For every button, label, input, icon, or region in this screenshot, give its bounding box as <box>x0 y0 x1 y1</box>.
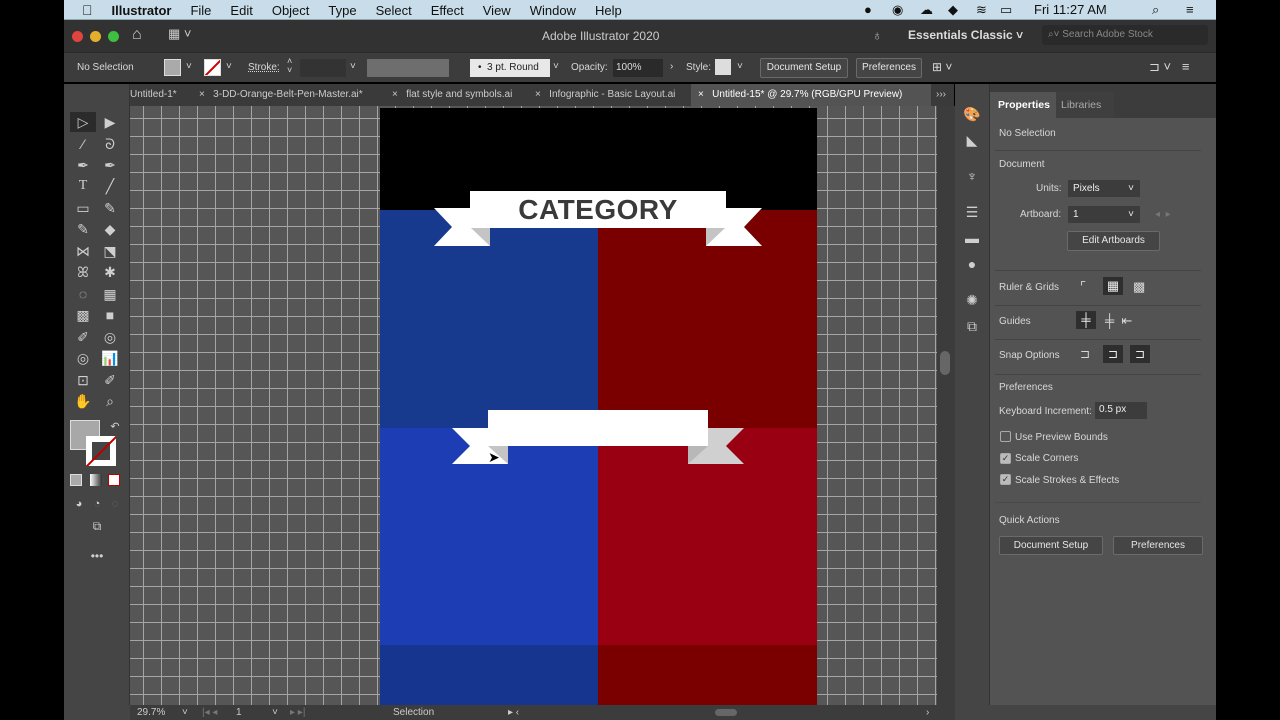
properties panel: ⌜ <box>1080 279 1086 294</box>
control bar: ˅ <box>737 61 743 72</box>
left toolbar: ⁄ <box>82 136 84 152</box>
title bar: ⌂ <box>132 26 142 43</box>
properties panel: ˅ <box>1128 183 1134 194</box>
left toolbar: ✱ <box>104 264 116 280</box>
left toolbar: ◌ <box>79 286 87 302</box>
properties panel: ▦ <box>1107 278 1119 293</box>
properties panel: 0.5 px <box>1099 404 1126 415</box>
left toolbar: ✒ <box>77 157 89 173</box>
left toolbar: ••• <box>91 549 103 563</box>
properties panel: Units: <box>1036 183 1062 194</box>
properties panel: ▩ <box>1133 279 1145 294</box>
left toolbar: ╱ <box>106 178 114 194</box>
properties panel: Preferences <box>1131 540 1185 551</box>
control bar: ˅ <box>553 61 559 72</box>
control bar: Style: <box>686 62 711 73</box>
left toolbar: ✎ <box>104 200 116 216</box>
left toolbar: ✐ <box>77 329 89 345</box>
panel icon strip: ♆ <box>967 168 977 184</box>
left toolbar: ⬔ <box>103 243 117 259</box>
mac menu bar: Fri 11:27 AM <box>1034 2 1107 17</box>
properties panel: Keyboard Increment: <box>999 406 1092 417</box>
left toolbar: ◔ <box>94 498 100 510</box>
left toolbar: ▶ <box>105 114 115 130</box>
title bar <box>64 20 1216 52</box>
mac menu bar: ◆ <box>948 2 958 17</box>
left toolbar: ✎ <box>77 221 89 237</box>
mac menu bar: ◉ <box>892 2 903 17</box>
control bar: Opacity: <box>571 62 608 73</box>
properties panel: Artboard: <box>1020 209 1061 220</box>
control bar: ˅ <box>226 61 232 72</box>
fill/stroke swatches <box>70 420 100 450</box>
properties panel: Scale Strokes & Effects <box>1015 475 1119 486</box>
panel icon strip: ⧉ <box>967 318 977 334</box>
left toolbar: ▦ <box>103 286 117 302</box>
properties panel: ◂ ▸ <box>1155 209 1171 220</box>
document tabs: × 3-DD-Orange-Belt-Pen-Master.ai* <box>199 89 363 100</box>
document tabs: Untitled-1* <box>130 89 177 100</box>
mac menu bar <box>64 0 1216 20</box>
title bar: Adobe Illustrator 2020 <box>542 29 659 43</box>
control bar: › <box>670 61 673 72</box>
properties panel: ✓ <box>1002 474 1009 484</box>
mac menu bar: ▭ <box>1000 2 1012 17</box>
left toolbar: ⧉ <box>93 519 101 533</box>
panel icon strip: ◣ <box>967 132 977 148</box>
left toolbar: ⌕ <box>106 393 114 409</box>
canvas with grid <box>130 106 937 705</box>
ribbon: blank <box>452 410 744 464</box>
control bar: ˅ <box>350 61 356 72</box>
ribbon: category <box>434 191 762 246</box>
properties panel: 1 <box>1073 209 1079 220</box>
left toolbar: ✋ <box>74 393 92 409</box>
properties panel: ╪ ⇤ <box>1105 313 1132 328</box>
title bar: ♁ <box>872 27 882 43</box>
panel icon strip: 🎨 <box>963 106 981 122</box>
left toolbar: ⊡ <box>77 372 89 388</box>
panel icon strip: ● <box>968 256 976 272</box>
control bar: ⊞ ˅ <box>932 60 952 74</box>
title bar: ⌕˅ Search Adobe Stock <box>1048 29 1153 40</box>
left toolbar: ▩ <box>76 307 90 323</box>
artboard <box>380 108 817 705</box>
left toolbar: ◌ <box>112 498 118 510</box>
properties panel: No Selection <box>999 128 1056 139</box>
properties panel: Snap Options <box>999 350 1060 361</box>
left toolbar: ▭ <box>76 200 90 216</box>
left toolbar: ⋈ <box>76 243 90 259</box>
properties panel: ✓ <box>1002 453 1009 463</box>
properties panel <box>990 84 1216 705</box>
document tabs: × Infographic - Basic Layout.ai <box>535 89 675 100</box>
properties panel: Quick Actions <box>999 515 1060 526</box>
document tabs: × flat style and symbols.ai <box>392 89 512 100</box>
control bar: 100% <box>616 62 642 73</box>
properties panel: ⊐ <box>1108 347 1118 361</box>
status bar: |◂ ◂ <box>202 707 217 718</box>
status bar: ▸ ‹ <box>508 707 519 718</box>
properties panel: Edit Artboards <box>1082 235 1145 246</box>
status bar: 29.7% ˅ <box>137 707 188 718</box>
left toolbar: ■ <box>106 307 114 323</box>
control bar: ˅ <box>287 65 292 75</box>
control bar: Stroke: <box>248 62 280 73</box>
mac menu bar: ≡ <box>1186 2 1194 17</box>
status bar <box>130 705 955 720</box>
panel icon strip: ▬ <box>965 230 979 246</box>
properties panel: Preferences <box>999 382 1053 393</box>
control bar: Document Setup <box>767 62 841 73</box>
blue column <box>380 210 598 428</box>
control bar: No Selection <box>77 62 134 73</box>
left toolbar: ✒ <box>104 157 116 173</box>
document tabs: × Untitled-15* @ 29.7% (RGB/GPU Preview) <box>698 89 902 100</box>
left toolbar: T <box>79 178 87 193</box>
panel icon strip: ✺ <box>966 292 978 308</box>
properties panel: Pixels <box>1073 183 1100 194</box>
properties panel: Document Setup <box>1014 540 1088 551</box>
left toolbar: ◕ <box>76 498 82 510</box>
left toolbar: ◎ <box>77 350 89 366</box>
control bar <box>64 52 1216 82</box>
left toolbar: ꕤ <box>77 264 89 280</box>
control bar: ⊐ ˅ ≡ <box>1149 59 1190 74</box>
control bar: ˅ <box>186 61 192 72</box>
ribbon text: CATEGORY <box>518 194 678 225</box>
title bar: ▦ ˅ <box>168 26 192 41</box>
left toolbar: 📊 <box>101 350 119 366</box>
left toolbar: ▷ <box>78 114 88 130</box>
left toolbar: ◎ <box>104 329 116 345</box>
panel icon strip <box>955 84 990 705</box>
left toolbar: ↶ <box>110 421 120 433</box>
mac menu bar: ● <box>864 2 872 17</box>
properties panel: Ruler & Grids <box>999 282 1059 293</box>
canvas scrollbar <box>937 106 955 705</box>
control bar: Preferences <box>862 62 916 73</box>
properties panel: Use Preview Bounds <box>1015 432 1108 443</box>
left toolbar: ◆ <box>105 221 115 237</box>
control bar: ˄ <box>287 56 292 66</box>
left toolbar: ✐ <box>104 372 116 388</box>
document tabs: ››› <box>936 89 946 100</box>
properties panel: Libraries <box>1061 99 1101 111</box>
status bar: 1 ˅ <box>236 707 278 718</box>
properties panel: ⊐ <box>1135 347 1145 361</box>
status bar: Selection <box>393 707 434 718</box>
title bar: Essentials Classic ˅ <box>908 28 1023 42</box>
mac menu bar: ☁ <box>920 2 933 17</box>
mac menu bar:  Illustrator File Edit Object Type Select Effect View Window Help <box>82 2 622 18</box>
properties panel: Document <box>999 159 1045 170</box>
properties panel: Guides <box>999 316 1031 327</box>
status bar: ▸ ▸| <box>290 707 305 718</box>
properties panel: ⊐ <box>1080 347 1090 361</box>
left toolbar <box>64 84 130 705</box>
mac menu bar: ≋ <box>976 2 987 17</box>
properties panel: Properties <box>998 99 1050 111</box>
red column <box>598 210 817 428</box>
control bar: • 3 pt. Round <box>478 62 539 73</box>
status bar: › <box>926 707 929 718</box>
properties panel: ╪ <box>1081 312 1091 327</box>
cursor: ➤ <box>488 449 500 465</box>
properties panel: Scale Corners <box>1015 453 1078 464</box>
document tabs <box>64 84 954 106</box>
left toolbar: ᘐ <box>105 136 115 152</box>
properties panel: ˅ <box>1128 209 1134 220</box>
mac menu bar: ⌕ <box>1152 2 1159 17</box>
panel icon strip: ☰ <box>966 204 978 220</box>
